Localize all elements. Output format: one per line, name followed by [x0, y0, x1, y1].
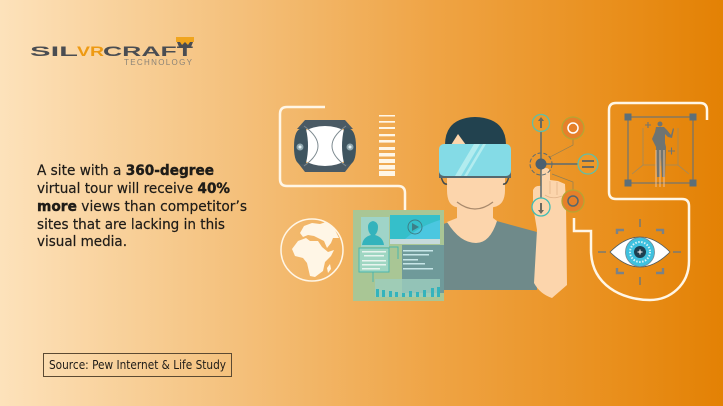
source box: Source: Pew Internet & Life Study: [49, 358, 226, 372]
logo: Silvrcraft Technology: SIL: [30, 44, 78, 59]
logo: Silvrcraft Technology: CRAFT: [103, 44, 194, 59]
panel: web dashboard: [353, 210, 444, 301]
icon: down arrow: [532, 198, 550, 216]
text block: 360-degree statistic: more views than competitor’s: [37, 199, 247, 215]
person: shirt: [443, 220, 537, 290]
diagram: control hub and icons: [530, 114, 598, 216]
person: raised arm and fist: [533, 168, 567, 298]
outline frame: body scan and eye: [574, 103, 707, 300]
text block: 360-degree statistic: virtual tour will receive 40%: [37, 181, 230, 197]
text block: 360-degree statistic: [37, 163, 247, 250]
icon: body scan: [624, 114, 696, 187]
icon: stacked level bars: [379, 115, 395, 176]
icon: bottom right dial: [562, 190, 584, 212]
icon: 360 camera: [294, 120, 356, 172]
logo: Silvrcraft Technology: VR: [77, 44, 104, 59]
logo: Silvrcraft Technology: TECHNOLOGY: [124, 58, 193, 67]
text block: 360-degree statistic: A site with a 360-degree: [37, 163, 214, 179]
icon: globe: [281, 219, 343, 281]
person: VR headset: [439, 144, 511, 184]
source box: [44, 354, 232, 376]
logo: Silvrcraft Technology: [30, 37, 194, 67]
icon: eye scan: [598, 219, 681, 285]
icon: up arrow: [532, 114, 550, 132]
text block: 360-degree statistic: visual media.: [37, 234, 127, 250]
icon: sliders: [578, 154, 598, 174]
person: neck and head: [445, 117, 506, 243]
text block: 360-degree statistic: sites that are lacking in this: [37, 217, 225, 233]
outline frame: camera: [280, 107, 405, 211]
icon: top right dial: [562, 117, 584, 139]
